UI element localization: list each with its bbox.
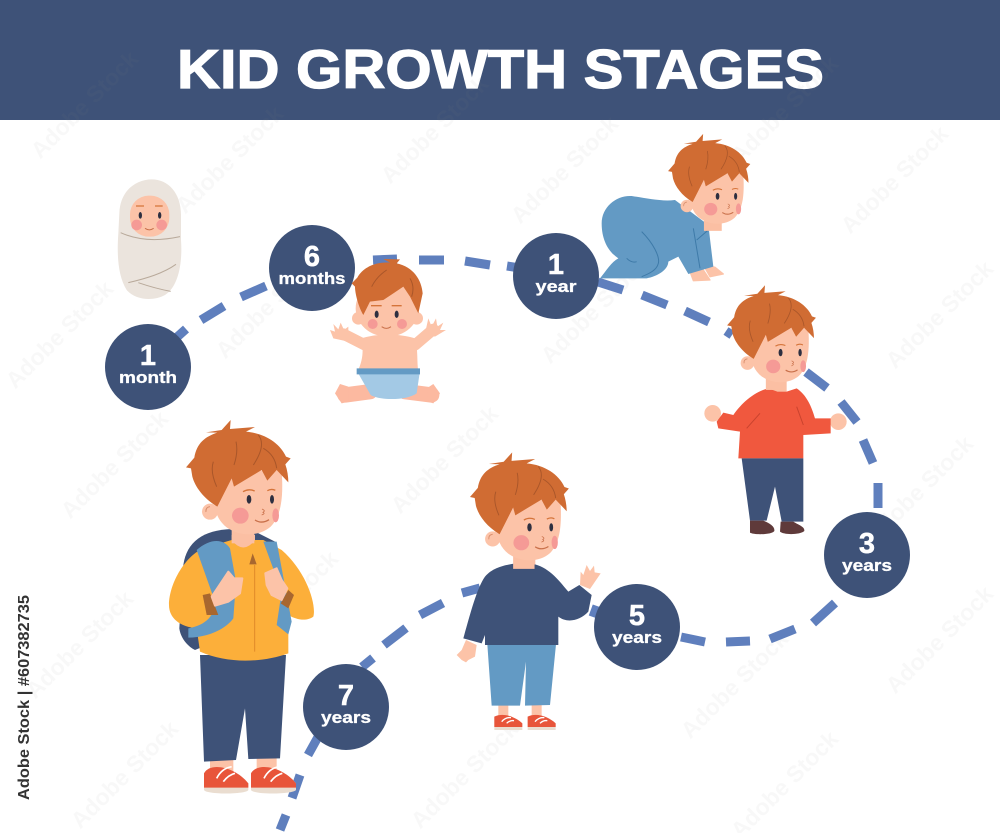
watermark pattern: Adobe Stock	[860, 430, 978, 548]
watermark pattern: Adobe Stock	[880, 255, 998, 373]
illustration: seven year old with backpack	[169, 420, 314, 794]
stage marker: 7 years: years	[321, 709, 371, 727]
watermark pattern: Adobe Stock	[25, 45, 143, 163]
watermark pattern: Adobe Stock	[0, 275, 118, 393]
watermark pattern: Adobe Stock	[405, 715, 523, 833]
watermark pattern: Adobe Stock	[375, 70, 493, 188]
stage marker: 5 years	[594, 584, 680, 670]
stage marker: 6 months	[269, 225, 355, 311]
stage marker: 5 years: years	[612, 629, 662, 647]
watermark pattern: Adobe Stock	[55, 405, 173, 523]
watermark pattern: Adobe Stock	[505, 110, 623, 228]
stage marker: 6 months: 6	[304, 241, 320, 273]
watermark pattern: Adobe Stock	[675, 625, 793, 743]
watermark pattern: Adobe Stock	[65, 715, 183, 833]
illustration: five year old waving	[457, 452, 601, 730]
title: KID GROWTH STAGES	[177, 38, 824, 100]
watermark pattern: Adobe Stock	[20, 585, 138, 703]
watermark pattern: Adobe Stock	[385, 400, 503, 518]
stage marker: 3 years: years	[842, 557, 892, 575]
illustration: three year old in red sweater	[704, 285, 847, 534]
stage marker: 5 years: 5	[629, 600, 645, 632]
dashed growth path	[176, 259, 878, 830]
watermark pattern: Adobe Stock	[835, 120, 953, 238]
watermark pattern: Adobe Stock	[225, 545, 343, 663]
stage marker: 1 month	[105, 324, 191, 410]
stage marker: 7 years: 7	[338, 680, 354, 712]
stage marker: 1 year: year	[536, 278, 577, 296]
illustration: crawling one year old	[600, 134, 750, 281]
stage marker: 6 months: months	[278, 270, 346, 288]
watermark pattern: Adobe Stock	[725, 50, 843, 168]
stage marker: 1 month: 1	[140, 340, 156, 372]
vertical stock id caption: Adobe Stock | #607382735	[16, 595, 33, 800]
watermark pattern: Adobe Stock	[170, 100, 288, 218]
stage marker: 7 years	[303, 664, 389, 750]
stage marker: 3 years	[824, 512, 910, 598]
stage marker: 1 year: 1	[548, 249, 564, 281]
stage marker: 1 month: month	[119, 369, 177, 387]
watermark pattern: Adobe Stock	[880, 580, 998, 698]
stage marker: 3 years: 3	[859, 528, 875, 560]
watermark pattern: Adobe Stock	[210, 245, 328, 363]
header banner	[0, 0, 1000, 120]
stage marker: 1 year	[513, 233, 599, 319]
illustration: six month baby	[330, 259, 446, 403]
illustration: swaddled newborn	[118, 179, 181, 299]
watermark pattern: Adobe Stock	[535, 250, 653, 368]
